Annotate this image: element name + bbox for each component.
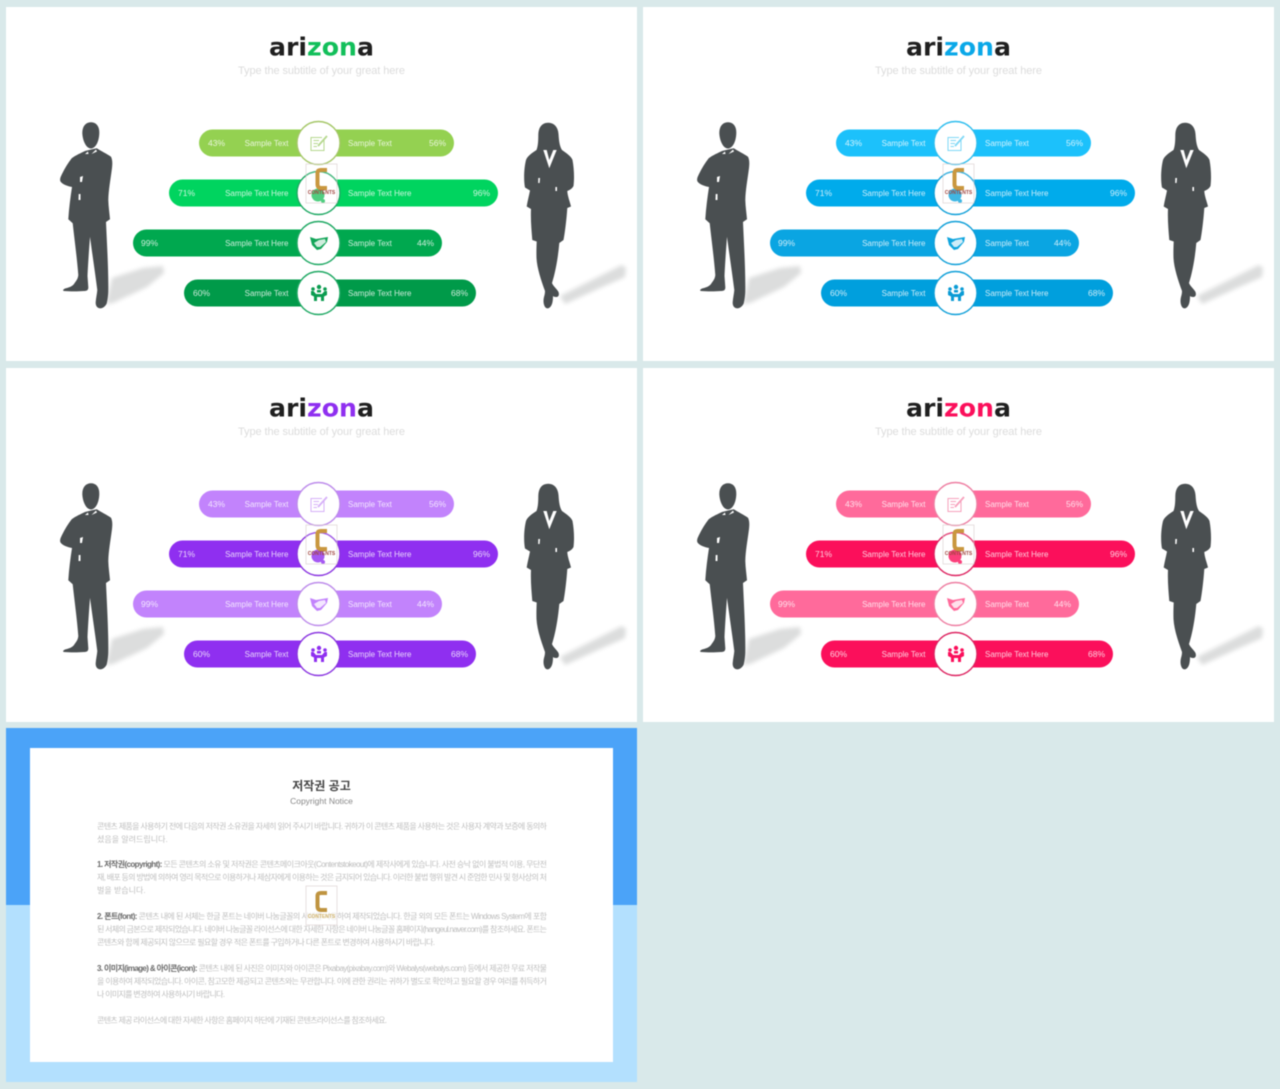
row 4: Sample Text	[245, 650, 289, 659]
row 1	[836, 482, 1091, 526]
row 2	[169, 532, 498, 576]
notice section 3: 나 이미지를 변경하여 사용하시기 바랍니다.	[97, 989, 225, 999]
watermark	[306, 886, 337, 925]
notice section 1: 재, 배포 등의 방법에 의하여 영리 목적으로 이용하거나 제삼자에게 이용하는 것은 금지되어 있습니다. 이러한 불법 행위 발견 시 준엄한 민사 및 형사상의 처	[97, 872, 547, 882]
row 4	[184, 272, 476, 314]
watermark: CONTENTS	[945, 551, 973, 557]
row 3: 44%	[417, 238, 434, 248]
watermark	[306, 164, 337, 203]
man silhouette	[60, 122, 164, 308]
woman silhouette	[524, 484, 626, 669]
notice heading: 저작권 공고	[292, 778, 351, 793]
row 1: Sample Text	[985, 139, 1030, 148]
row 2: 96%	[1110, 549, 1127, 559]
row 3	[770, 222, 1079, 264]
man silhouette	[60, 483, 164, 669]
notice section 2: 된 서체의 금본으로 제작되었습니다. 네이버 나눔글꼴 라이선스에 대한 자세한 사항은 네이버 나눔글꼴 홈페이지(hangeul.naver.com)를 참조하세요. 폰트는	[97, 924, 547, 934]
watermark	[943, 164, 974, 203]
notice section 2: 2. 폰트(font): 콘텐츠 내에 된 서체는 한글 폰트는 네이버 나눔글꼴의 서체를 사용하여 제작되었습니다. 한글 외의 모든 폰트는 Windows System에 포함	[97, 911, 548, 921]
row 2: 71%	[178, 549, 195, 559]
row 4: 60%	[830, 649, 847, 659]
row 1: 56%	[429, 499, 446, 509]
title: arizona	[269, 32, 374, 62]
row 4: Sample Text Here	[348, 289, 412, 298]
row 2: Sample Text Here	[225, 189, 289, 198]
notice footer: 콘텐츠 제공 라이선스에 대한 자세한 사항은 홈페이지 하단에 기재된 콘텐츠라이선스를 참조하세요.	[97, 1015, 387, 1025]
title: arizona	[269, 394, 374, 422]
row 3: Sample Text Here	[862, 239, 926, 248]
row 3: Sample Text	[348, 600, 393, 609]
row 3: 44%	[1054, 238, 1071, 248]
row 2: Sample Text Here	[862, 189, 926, 198]
row 4: 60%	[193, 649, 210, 659]
notice section 2: 콘텐츠와 함께 제공되지 않으므로 필요할 경우 적은 폰트를 구입하거나 다른 폰트로 변경하여 사용하시기 바랍니다.	[97, 937, 435, 947]
subtitle: Type the subtitle of your great here	[875, 426, 1042, 438]
row 2: 71%	[815, 188, 832, 198]
row 2: 71%	[178, 188, 195, 198]
row 4: 68%	[451, 649, 468, 659]
row 4: Sample Text Here	[348, 650, 412, 659]
row 1: Sample Text	[348, 500, 393, 509]
row 2: Sample Text Here	[862, 550, 926, 559]
notice section 1: 벌을 받습니다.	[97, 885, 146, 895]
row 4: 60%	[193, 288, 210, 298]
notice section 1: 1. 저작권(copyright): 모든 콘텐츠의 소유 및 저작권은 콘텐츠메이크아웃(Contentstokeout)에 제작사에게 있습니다. 사전 승낙 없이 불법적 이용, 무단전	[97, 859, 547, 869]
row 2	[169, 172, 498, 214]
row 1: Sample Text	[245, 139, 289, 148]
subtitle: Type the subtitle of your great here	[238, 426, 405, 438]
man silhouette	[697, 483, 801, 669]
row 3	[133, 222, 442, 264]
row 2: Sample Text Here	[348, 550, 412, 559]
watermark	[306, 525, 337, 564]
row 1: 43%	[845, 138, 862, 148]
panel: copyright notice	[6, 728, 637, 1082]
title: arizona	[906, 32, 1011, 62]
row 1	[199, 122, 454, 164]
row 1: Sample Text	[245, 500, 289, 509]
row 4	[821, 272, 1113, 314]
notice intro: 셨음을 알려드립니다.	[97, 834, 168, 844]
woman silhouette	[1161, 484, 1263, 669]
notice subheading: Copyright Notice	[290, 796, 353, 806]
row 2: Sample Text Here	[225, 550, 289, 559]
watermark	[943, 525, 974, 564]
row 2: 96%	[1110, 188, 1127, 198]
title: arizona	[906, 394, 1011, 422]
row 2: Sample Text Here	[985, 550, 1049, 559]
notice section 3: 을 이용하여 제작되었습니다. 아이콘, 참고모한 제공되고 콘텐츠와는 무관합니다. 이에 관한 권리는 귀하가 별도로 확인하고 필요할 경우 여러를 취득하거	[97, 976, 547, 986]
row 4: Sample Text Here	[985, 650, 1049, 659]
row 2: Sample Text Here	[985, 189, 1049, 198]
row 1: 56%	[1066, 138, 1083, 148]
row 4: Sample Text	[882, 289, 926, 298]
row 1: 43%	[208, 499, 225, 509]
row 4: Sample Text	[882, 650, 926, 659]
row 1: Sample Text	[882, 500, 926, 509]
notice section 3	[97, 963, 547, 999]
row 3: Sample Text	[985, 600, 1030, 609]
row 3: Sample Text	[985, 239, 1030, 248]
row 4: 68%	[451, 288, 468, 298]
row 1: 43%	[208, 138, 225, 148]
row 1: 43%	[845, 499, 862, 509]
row 4: 68%	[1088, 288, 1105, 298]
row 2: Sample Text Here	[348, 189, 412, 198]
row 3: 99%	[778, 238, 795, 248]
row 3: 44%	[417, 599, 434, 609]
notice section 2	[97, 911, 548, 947]
row 3: 99%	[141, 599, 158, 609]
row 2	[806, 172, 1135, 214]
row 3: 99%	[778, 599, 795, 609]
watermark: CONTENTS	[308, 190, 336, 196]
row 4: 68%	[1088, 649, 1105, 659]
notice section 1	[97, 859, 547, 895]
row 3: Sample Text Here	[862, 600, 926, 609]
row 2: 96%	[473, 549, 490, 559]
panel: purple slide	[6, 368, 637, 722]
row 2	[806, 532, 1135, 576]
woman silhouette	[524, 123, 626, 308]
row 1: Sample Text	[348, 139, 393, 148]
subtitle: Type the subtitle of your great here	[875, 65, 1042, 77]
subtitle: Type the subtitle of your great here	[238, 65, 405, 77]
row 1	[836, 122, 1091, 164]
row 4	[184, 632, 476, 676]
notice intro	[97, 821, 548, 844]
row 1: Sample Text	[882, 139, 926, 148]
watermark: CONTENTS	[308, 551, 336, 557]
watermark: CONTENTS	[308, 914, 336, 920]
row 3: 44%	[1054, 599, 1071, 609]
row 2: 96%	[473, 188, 490, 198]
row 2: 71%	[815, 549, 832, 559]
row 3: 99%	[141, 238, 158, 248]
row 4	[821, 632, 1113, 676]
panel: pink slide	[643, 368, 1274, 722]
row 4: Sample Text	[245, 289, 289, 298]
row 3: Sample Text	[348, 239, 393, 248]
row 4: 60%	[830, 288, 847, 298]
panel: green slide	[6, 7, 637, 361]
panel: blue slide	[643, 7, 1274, 361]
watermark: CONTENTS	[945, 190, 973, 196]
man silhouette	[697, 122, 801, 308]
row 1: 56%	[1066, 499, 1083, 509]
row 1: Sample Text	[985, 500, 1030, 509]
row 3	[770, 582, 1079, 626]
row 4: Sample Text Here	[985, 289, 1049, 298]
woman silhouette	[1161, 123, 1263, 308]
notice intro: 콘텐츠 제품을 사용하기 전에 다음의 저작권 소유권을 자세히 읽어 주시기 바랍니다. 귀하가 이 콘텐츠 제품을 사용하는 것은 사용자 계약과 보증에 동의하	[97, 821, 548, 831]
row 3	[133, 582, 442, 626]
notice section 3: 3. 이미지(image) & 아이콘(icon): 콘텐츠 내에 된 사진은 이미지와 아이콘은 Pixabay(pixabay.com)와 Webalys(webalys.com) 등에서 제공한 무료 저작물	[97, 963, 547, 973]
row 1: 56%	[429, 138, 446, 148]
row 1	[199, 482, 454, 526]
row 3: Sample Text Here	[225, 600, 289, 609]
row 3: Sample Text Here	[225, 239, 289, 248]
